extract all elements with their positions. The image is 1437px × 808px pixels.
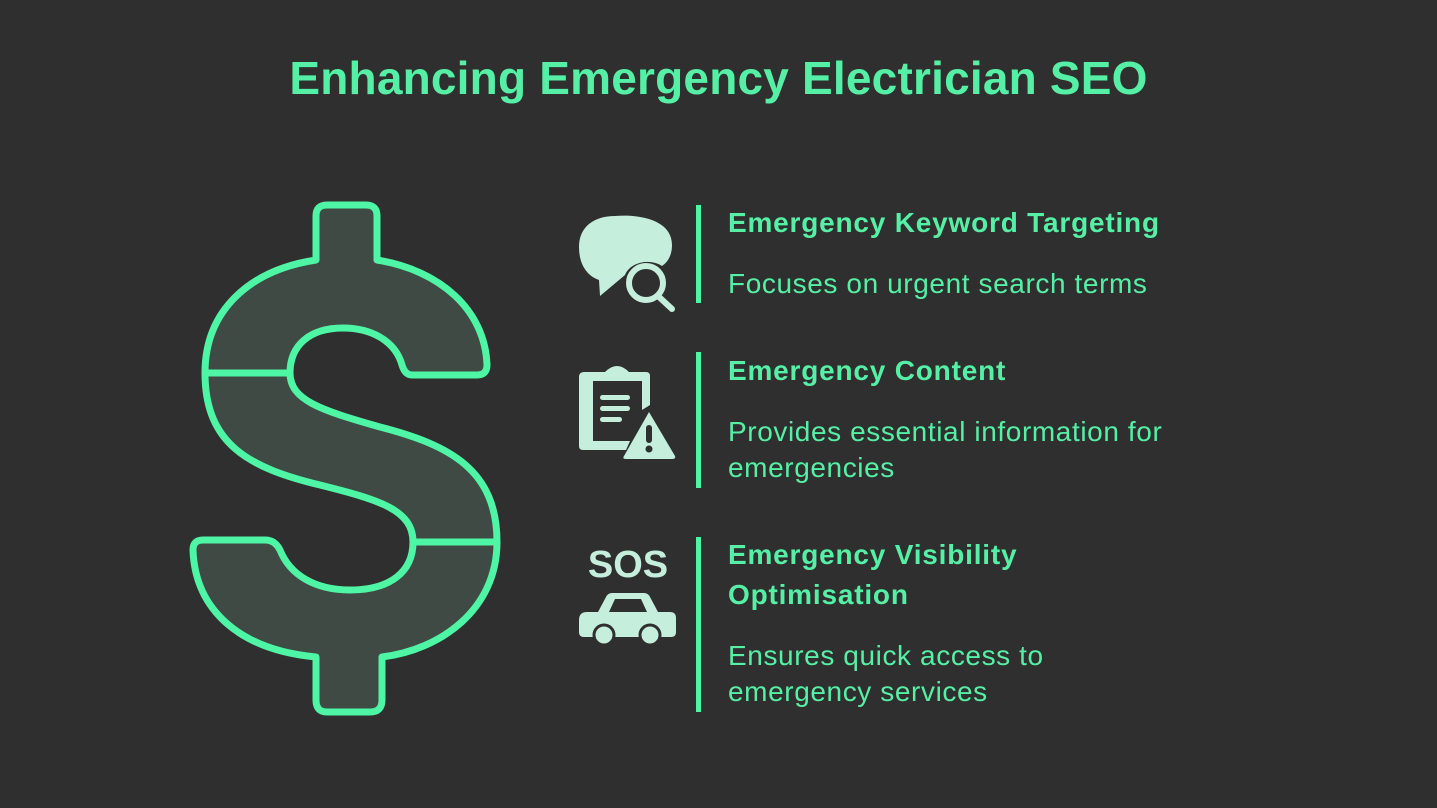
title: Enhancing Emergency Electrician SEO <box>289 52 1148 104</box>
item 1: Emergency Keyword Targeting <box>728 207 1160 238</box>
item 3: Emergency Visibility <box>728 539 1017 570</box>
item 3: Ensures quick access to <box>728 640 1044 671</box>
item 2: Provides essential information for <box>728 416 1162 447</box>
item 2: emergencies <box>728 452 895 483</box>
icon: SOS car: SOS <box>588 544 668 586</box>
icon: clipboard warning <box>579 366 676 459</box>
icon: chat search <box>579 216 675 312</box>
item 3 <box>728 539 1044 707</box>
icon: SOS car <box>579 544 676 644</box>
item 2 <box>728 355 1162 483</box>
item 2: Emergency Content <box>728 355 1006 386</box>
item 1 <box>728 207 1160 299</box>
item 1: Focuses on urgent search terms <box>728 268 1148 299</box>
item 3: emergency services <box>728 676 988 707</box>
item 3: Optimisation <box>728 579 909 610</box>
